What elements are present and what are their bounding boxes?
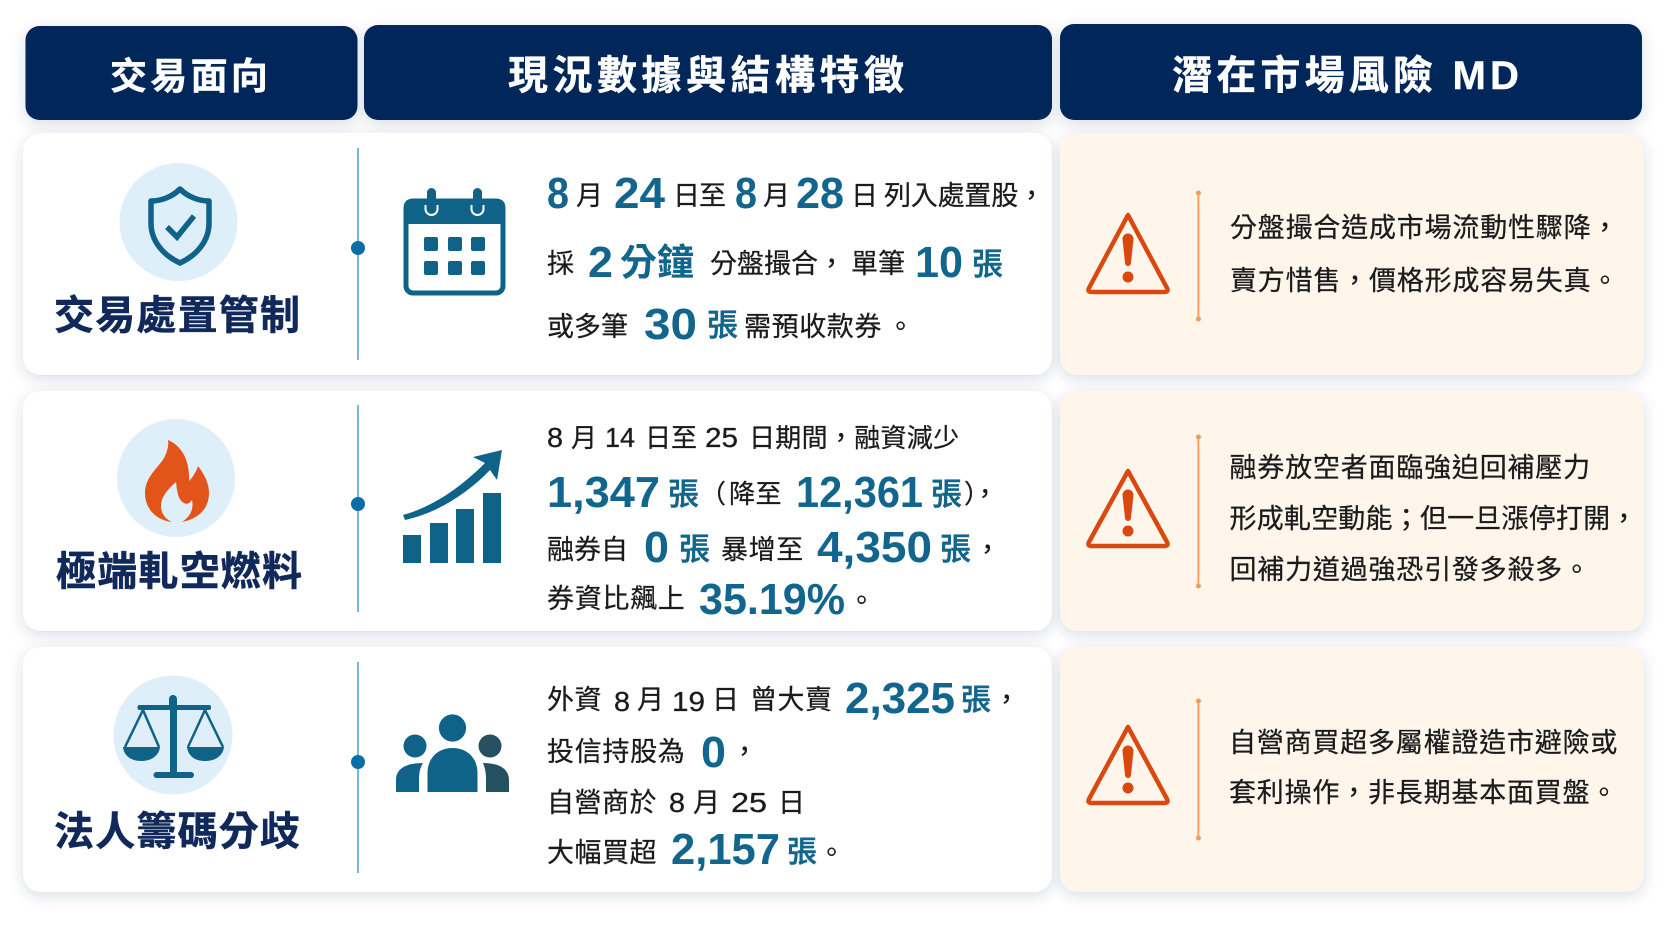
- data text: 分鐘: [620, 242, 694, 283]
- data text: 25: [731, 787, 767, 818]
- risk text: [1229, 728, 1618, 808]
- orange divider: [1196, 434, 1201, 588]
- data text: 8: [735, 169, 757, 218]
- data text: 2,157: [671, 825, 780, 874]
- icon: warning triangle: [1088, 727, 1168, 803]
- risk text: 分盤撮合造成市場流動性驟降，: [1230, 213, 1619, 243]
- row label: 極端軋空燃料: [56, 550, 303, 594]
- divider with dot: [351, 405, 365, 612]
- header: trading aspect: [26, 26, 358, 120]
- data text: 8: [547, 169, 569, 218]
- data text: 日至: [645, 423, 697, 453]
- data text: 張: [668, 477, 699, 512]
- icon: balance scale: [114, 676, 232, 794]
- data text: [547, 674, 1020, 874]
- data text: ）: [964, 479, 990, 509]
- data text: 。: [887, 312, 914, 342]
- divider with dot: [351, 662, 365, 873]
- data text: 10: [915, 238, 963, 287]
- data text: 張: [940, 532, 971, 567]
- data text: 單筆: [851, 249, 905, 279]
- icon: flame: [117, 419, 235, 537]
- data text: 日: [712, 685, 739, 715]
- row label: 法人籌碼分歧: [54, 810, 301, 854]
- panel: risk 3: [1060, 647, 1644, 892]
- panel: trading disposal control: [23, 133, 1052, 375]
- data text: 券資比飆上: [547, 584, 686, 614]
- header: potential market risk: 潛在市場風險 MD: [1172, 54, 1523, 98]
- data text: 張: [707, 308, 738, 343]
- data text: 曾大賣: [750, 685, 832, 715]
- icon: people: [396, 714, 509, 792]
- data text: 8: [547, 422, 563, 453]
- panel: institutional chip divergence: [23, 647, 1052, 892]
- data text: 日至: [673, 181, 725, 211]
- data text: 。: [818, 838, 845, 868]
- data text: 張: [679, 532, 710, 567]
- data text: 。: [848, 586, 875, 616]
- data text: 採: [547, 249, 574, 279]
- data text: 張: [931, 477, 962, 512]
- data text: 自營商於: [547, 788, 657, 818]
- data text: （: [700, 479, 726, 509]
- data text: 28: [796, 169, 844, 218]
- risk text: 回補力道過強恐引發多殺多。: [1230, 555, 1591, 585]
- data text: 2: [588, 238, 613, 287]
- data text: [547, 422, 1001, 624]
- data text: 張: [972, 247, 1003, 282]
- data text: 月: [571, 423, 597, 453]
- data text: 月: [576, 181, 603, 211]
- divider with dot: [351, 148, 365, 360]
- risk text: [1230, 213, 1619, 296]
- panel: risk 1: [1060, 133, 1644, 375]
- data text: 需預收款券: [744, 312, 882, 342]
- header: trading aspect: 交易面向: [110, 56, 271, 97]
- data text: ，: [972, 479, 998, 509]
- data text: 35.19%: [699, 575, 845, 624]
- header: current data and structure: [364, 25, 1052, 120]
- data text: 或多筆: [547, 312, 628, 342]
- orange divider: [1196, 190, 1201, 322]
- data text: 月: [763, 181, 790, 211]
- data text: 0: [701, 728, 726, 777]
- data text: ，: [974, 535, 1001, 565]
- orange divider: [1196, 698, 1201, 840]
- data text: 列入處置股，: [884, 181, 1045, 211]
- data text: 8: [669, 787, 685, 818]
- data text: 2,325: [845, 674, 955, 723]
- risk text: 融券放空者面臨強迫回補壓力: [1230, 453, 1591, 483]
- data text: 4,350: [817, 523, 932, 572]
- data text: ，: [993, 685, 1020, 715]
- risk text: 套利操作，非長期基本面買盤。: [1229, 778, 1618, 808]
- data text: 外資: [547, 685, 602, 715]
- risk text: 自營商買超多屬權證造市避險或: [1229, 728, 1618, 758]
- row label: 交易處置管制: [54, 294, 301, 338]
- data text: 12,361: [796, 468, 923, 517]
- data text: 14: [605, 422, 635, 453]
- data text: 暴增至: [721, 535, 804, 565]
- data text: 日: [851, 181, 878, 211]
- data text: [547, 169, 1045, 349]
- data text: 張: [961, 684, 991, 717]
- panel: extreme short-squeeze fuel: [23, 391, 1052, 631]
- data text: 日期間，融資減少: [749, 423, 959, 453]
- data text: 30: [644, 300, 697, 349]
- risk text: 賣方惜售，價格形成容易失真。: [1230, 266, 1619, 296]
- data text: ，: [818, 249, 845, 279]
- data text: 25: [705, 422, 738, 453]
- icon: shield: [120, 163, 238, 281]
- icon: warning triangle: [1088, 471, 1168, 546]
- data text: 月: [637, 685, 664, 715]
- data text: 24: [614, 169, 666, 218]
- data text: ，: [731, 737, 758, 767]
- data text: 融券自: [547, 535, 628, 565]
- header: current data and structure: 現況數據與結構特徵: [508, 54, 908, 98]
- icon: growth chart: [403, 450, 502, 563]
- data text: 8: [614, 686, 630, 717]
- header: potential market risk: [1060, 24, 1642, 120]
- icon: calendar: [404, 188, 505, 293]
- data text: 大幅買超: [547, 838, 657, 868]
- data text: 0: [644, 523, 669, 572]
- data text: 1,347: [547, 468, 660, 517]
- panel: risk 2: [1060, 391, 1644, 631]
- data text: 降至: [729, 479, 782, 509]
- icon: warning triangle: [1088, 215, 1168, 292]
- risk text: [1230, 453, 1638, 585]
- data text: 月: [693, 788, 720, 818]
- data text: 19: [672, 686, 705, 717]
- data text: 投信持股為: [547, 737, 686, 767]
- data text: 日: [778, 788, 805, 818]
- data text: 張: [787, 836, 817, 869]
- risk text: 形成軋空動能；但一旦漲停打開，: [1230, 504, 1638, 534]
- data text: 分盤撮合: [710, 249, 818, 279]
